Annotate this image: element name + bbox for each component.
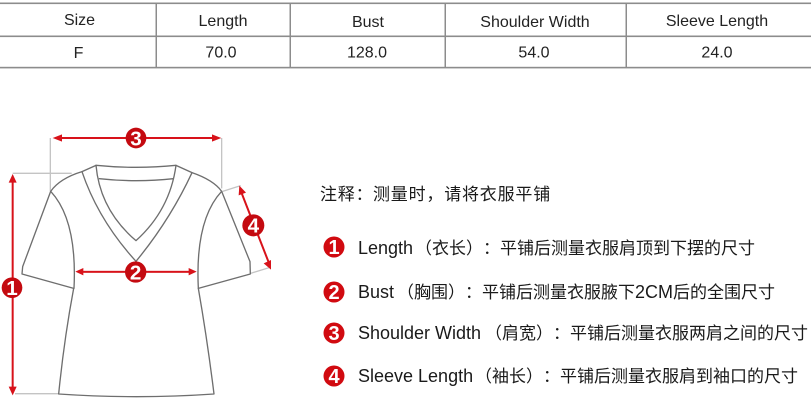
table header row: Length <box>199 13 247 30</box>
table value row <box>74 44 733 62</box>
note heading: 注释：测量时，请将衣服平铺 <box>320 180 550 205</box>
legend item 1: length: （衣长）： <box>415 234 500 259</box>
legend item 2: bust: 2CM <box>635 282 673 302</box>
icon: badge 3: 3 <box>328 323 340 345</box>
icon: badge 2: 2 <box>328 282 340 304</box>
legend item 2: bust: Bust <box>358 282 394 302</box>
arrow 4: sleeve length <box>239 186 271 270</box>
table header row: Shoulder Width <box>480 14 590 31</box>
table value row: F <box>74 45 84 62</box>
size table <box>0 2 811 68</box>
table header row: Bust <box>352 14 385 31</box>
legend item 4: sleeve length: （袖长）： <box>475 362 560 387</box>
table header row: Sleeve Length <box>666 13 768 30</box>
legend item 1: length: Length <box>358 238 413 258</box>
legend item 3: shoulder width: Shoulder Width <box>358 323 481 343</box>
arrow 2: bust <box>75 261 197 284</box>
table value row: 24.0 <box>701 44 733 62</box>
icon: badge 1: 1 <box>328 237 340 259</box>
legend item 2: bust: 后的全围尺寸 <box>673 278 775 303</box>
icon: t-shirt outline <box>22 165 250 397</box>
table value row: 128.0 <box>347 44 387 62</box>
legend item 1: length <box>324 234 755 259</box>
arrow 3: shoulder width: 3 <box>130 127 142 150</box>
legend item 2: bust <box>324 278 775 304</box>
table header row <box>64 12 768 31</box>
icon: badge 4: 4 <box>328 366 340 388</box>
arrow 3: shoulder width <box>53 127 221 150</box>
table value row: 54.0 <box>518 44 550 62</box>
icon: badge 3 <box>324 322 344 345</box>
icon: badge 2 <box>324 282 344 304</box>
icon: badge 4 <box>324 366 344 388</box>
arrow 4: sleeve length: 4 <box>248 215 260 238</box>
arrow 1: length: 1 <box>6 277 18 300</box>
legend item 1: length: 平铺后测量衣服肩顶到下摆的尺寸 <box>500 234 755 259</box>
icon: badge 1 <box>324 236 344 259</box>
legend item 4: sleeve length: Sleeve Length <box>358 366 473 386</box>
legend item 4: sleeve length <box>324 362 798 388</box>
legend item 2: bust: 平铺后测量衣服腋下 <box>482 278 635 303</box>
arrow 1: length <box>2 174 22 395</box>
legend item 3: shoulder width: 平铺后测量衣服两肩之间的尺寸 <box>570 319 808 344</box>
legend item 3: shoulder width <box>324 319 808 345</box>
table value row: 70.0 <box>205 44 237 62</box>
garment measurement diagram <box>2 127 271 397</box>
extension guide lines <box>13 138 270 394</box>
legend item 3: shoulder width: （肩宽）： <box>485 319 570 344</box>
legend item 4: sleeve length: 平铺后测量衣服肩到袖口的尺寸 <box>560 362 798 387</box>
arrow 2: bust: 2 <box>130 261 141 284</box>
legend item 2: bust: （胸围）： <box>397 278 482 303</box>
table header row: Size <box>64 12 95 29</box>
